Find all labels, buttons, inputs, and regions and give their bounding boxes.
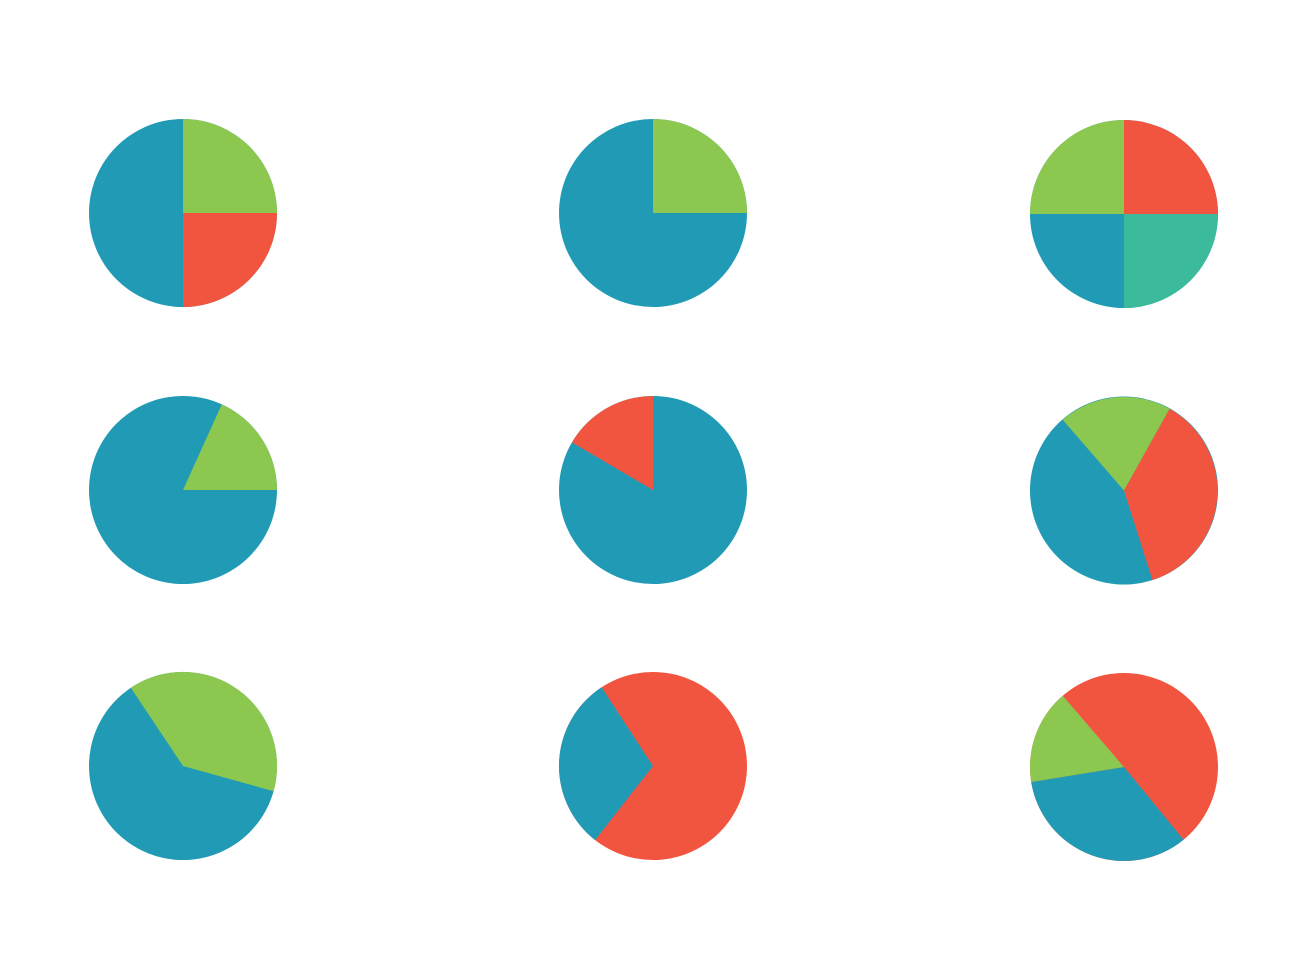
pie chart: half blue, quarter green, quarter red [89, 119, 277, 307]
slice: blue [559, 687, 653, 840]
slice: green quarter [1030, 120, 1124, 214]
slice: red [1124, 409, 1217, 580]
slice: green quarter [183, 119, 277, 213]
pie chart: mostly blue with small green slice [89, 396, 277, 584]
slice: teal quarter [1124, 214, 1218, 308]
slice: green [131, 672, 277, 791]
slice: blue [1031, 767, 1184, 861]
pie chart: three quarters blue, quarter green [559, 119, 747, 307]
slice: green [1030, 696, 1124, 782]
pie chart: red, blue and green slices [1030, 673, 1218, 861]
pie chart: mostly blue with small red slice [559, 396, 747, 584]
slice: red [572, 396, 653, 490]
slice: green quarter [653, 119, 747, 213]
slice: red quarter [1124, 120, 1218, 214]
pie chart: mostly red with blue slice [559, 672, 747, 860]
pie chart: four equal quarters [1030, 120, 1218, 308]
slice: green [1063, 397, 1170, 490]
slice: green [183, 404, 277, 490]
pie chart: blue and green slices [89, 672, 277, 860]
slice: red quarter [183, 213, 277, 307]
pie chart: blue, green and red slices [1030, 396, 1218, 584]
